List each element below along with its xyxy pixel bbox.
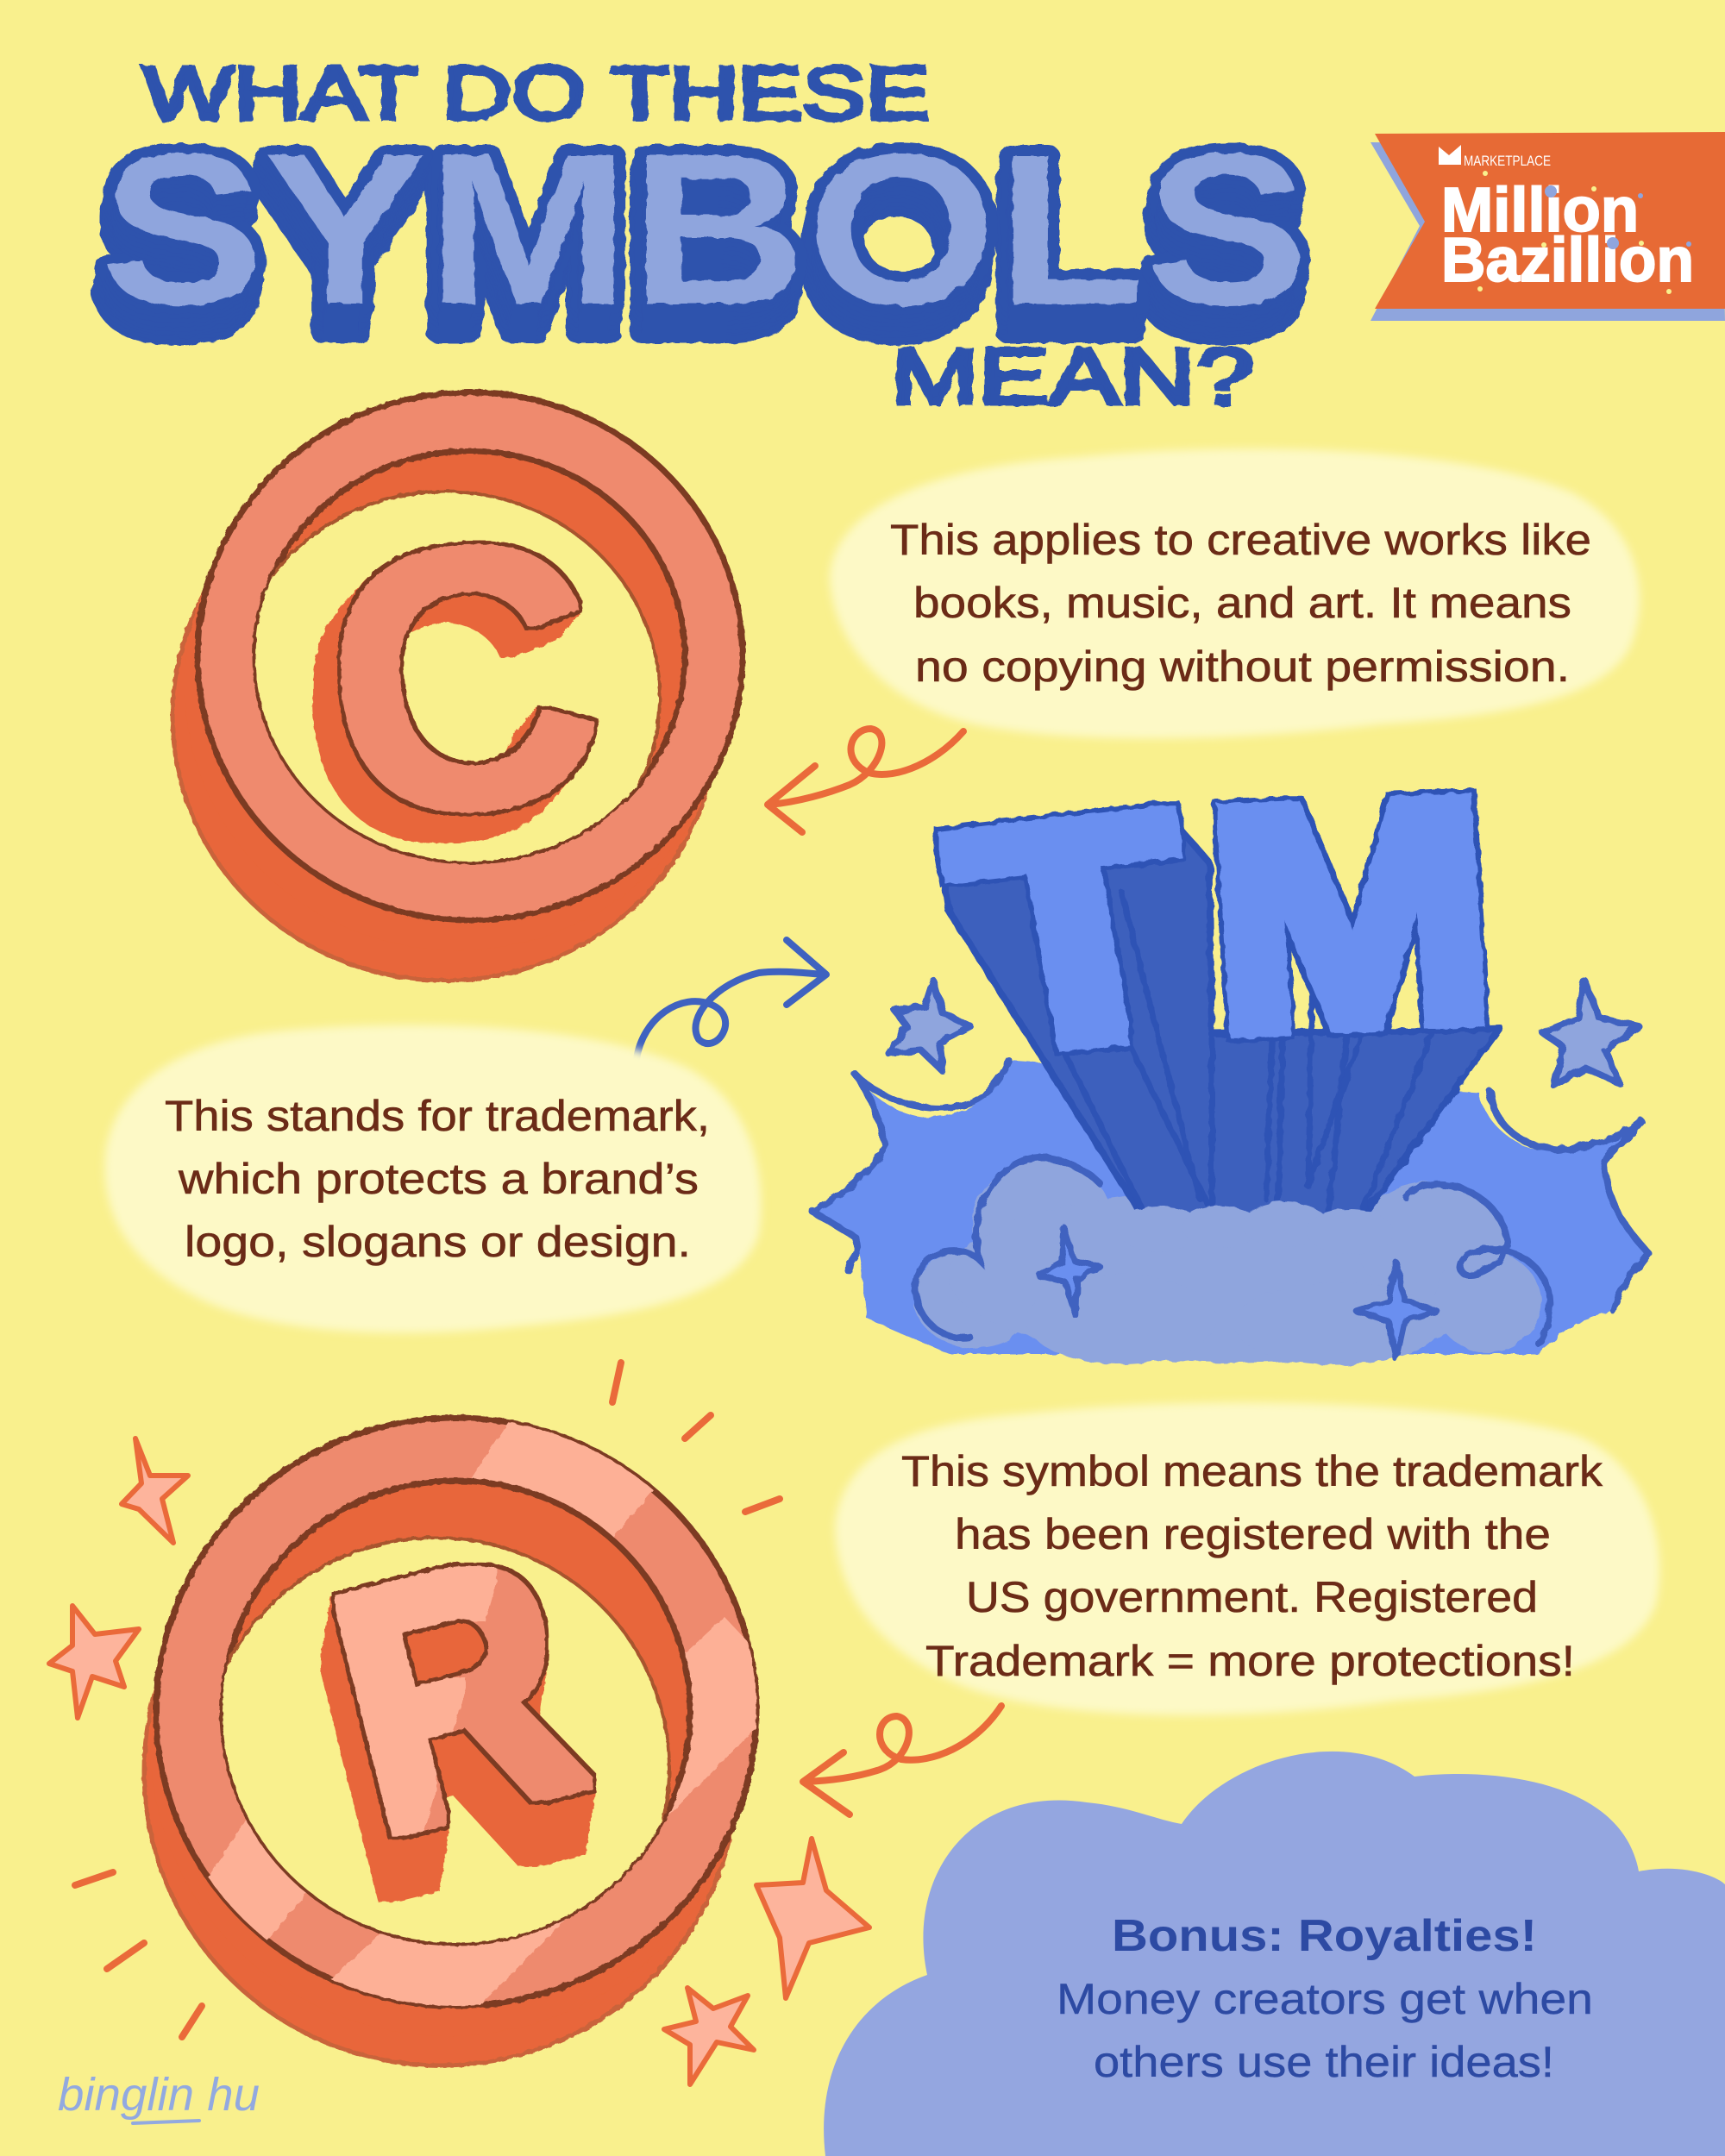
trademark symbol illustration bbox=[812, 732, 1648, 1365]
arrow: registered bbox=[803, 1706, 1001, 1814]
panel: bonus cloud bbox=[824, 1752, 1725, 2156]
callout: copyright: books, music, and art. It means bbox=[913, 579, 1571, 627]
title bbox=[101, 52, 1308, 421]
ticks around R bbox=[75, 1363, 780, 2037]
callout: registered bbox=[835, 1402, 1659, 1715]
arrow: copyright bbox=[768, 729, 963, 832]
copyright symbol bbox=[172, 392, 743, 981]
cloud puffs over extrusion base bbox=[1117, 1202, 1393, 1254]
cloud outlines bbox=[915, 1157, 1550, 1344]
letter M: M bbox=[1199, 732, 1503, 1097]
cloud bbox=[913, 1160, 1541, 1365]
callout: registered: has been registered with the bbox=[955, 1510, 1551, 1558]
stars around R bbox=[49, 1438, 869, 2084]
artist signature: binglin hu bbox=[58, 2069, 260, 2121]
burst bbox=[812, 1061, 1648, 1354]
bonus text: Money creators get when bbox=[1057, 1975, 1593, 2023]
callout: trademark: logo, slogans or design. bbox=[185, 1218, 691, 1266]
callout: trademark: This stands for trademark, bbox=[165, 1092, 710, 1140]
logo badge: Marketplace Million Bazillion: Million bbox=[1441, 176, 1639, 245]
title word: symbols: SYMBOLS bbox=[101, 109, 1308, 349]
callout: registered: US government. Registered bbox=[966, 1573, 1538, 1621]
bonus heading: Bonus: Royalties! bbox=[1112, 1911, 1537, 1961]
arrow: trademark bbox=[637, 940, 826, 1059]
callout: registered: This symbol means the trademark bbox=[901, 1447, 1603, 1495]
letter C: C bbox=[308, 460, 618, 899]
callout: trademark bbox=[105, 1025, 761, 1333]
title line: mean: MEAN? bbox=[891, 333, 1254, 421]
logo badge: Marketplace Million Bazillion bbox=[1371, 132, 1725, 321]
sparkles in cloud bbox=[1032, 1222, 1437, 1359]
panel: bonus cloud: others use their ideas! bbox=[1094, 2038, 1554, 2086]
burst outlines bbox=[812, 1061, 1648, 1311]
stars around TM bbox=[888, 981, 1639, 1086]
letter T: T bbox=[931, 748, 1220, 1119]
callout: copyright: This applies to creative works like bbox=[890, 516, 1591, 564]
letter R: R bbox=[303, 1480, 611, 1906]
logo badge: Marketplace Million Bazillion: Bazillion bbox=[1441, 226, 1694, 295]
callout: copyright: no copying without permission. bbox=[915, 642, 1570, 691]
callout: trademark: which protects a brand’s bbox=[178, 1155, 699, 1203]
logo badge: Marketplace Million Bazillion: MARKETPLACE bbox=[1464, 153, 1551, 169]
registered symbol bbox=[144, 1408, 794, 2065]
callout: registered: Trademark = more protections! bbox=[925, 1637, 1575, 1685]
callout: copyright bbox=[830, 448, 1640, 738]
title line: what do these: WHAT DO THESE bbox=[143, 52, 930, 135]
extrusion of T and M bbox=[942, 828, 1500, 1224]
